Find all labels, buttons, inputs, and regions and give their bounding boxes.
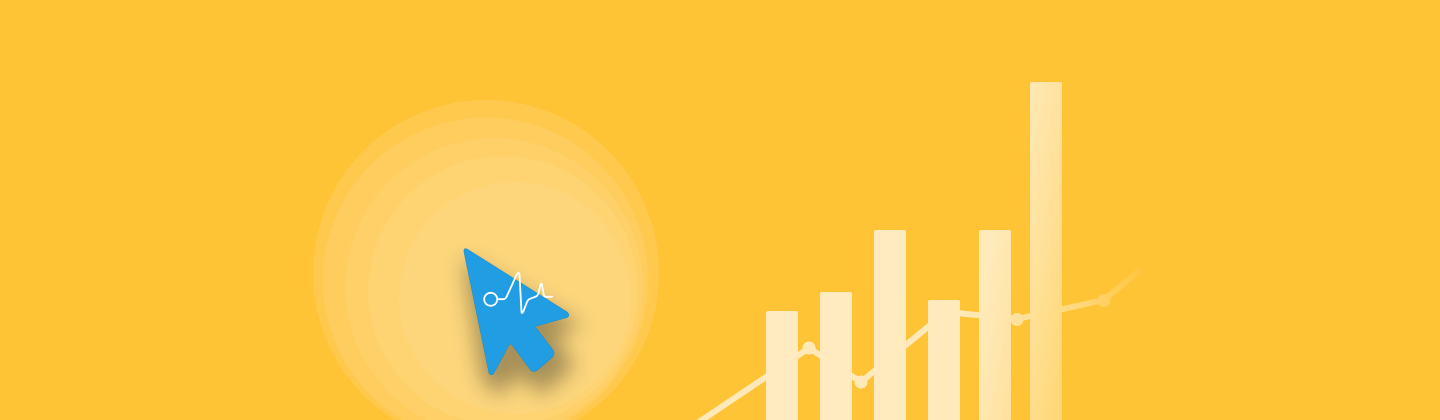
bar chart xyxy=(766,82,1062,420)
cursor arrow xyxy=(464,249,569,375)
cursor shadow xyxy=(463,258,582,396)
trend line chart xyxy=(697,270,1140,420)
line points xyxy=(802,294,1110,388)
concentric glow circles xyxy=(313,100,659,420)
heartbeat line xyxy=(484,273,552,313)
cursor icon xyxy=(463,249,582,396)
